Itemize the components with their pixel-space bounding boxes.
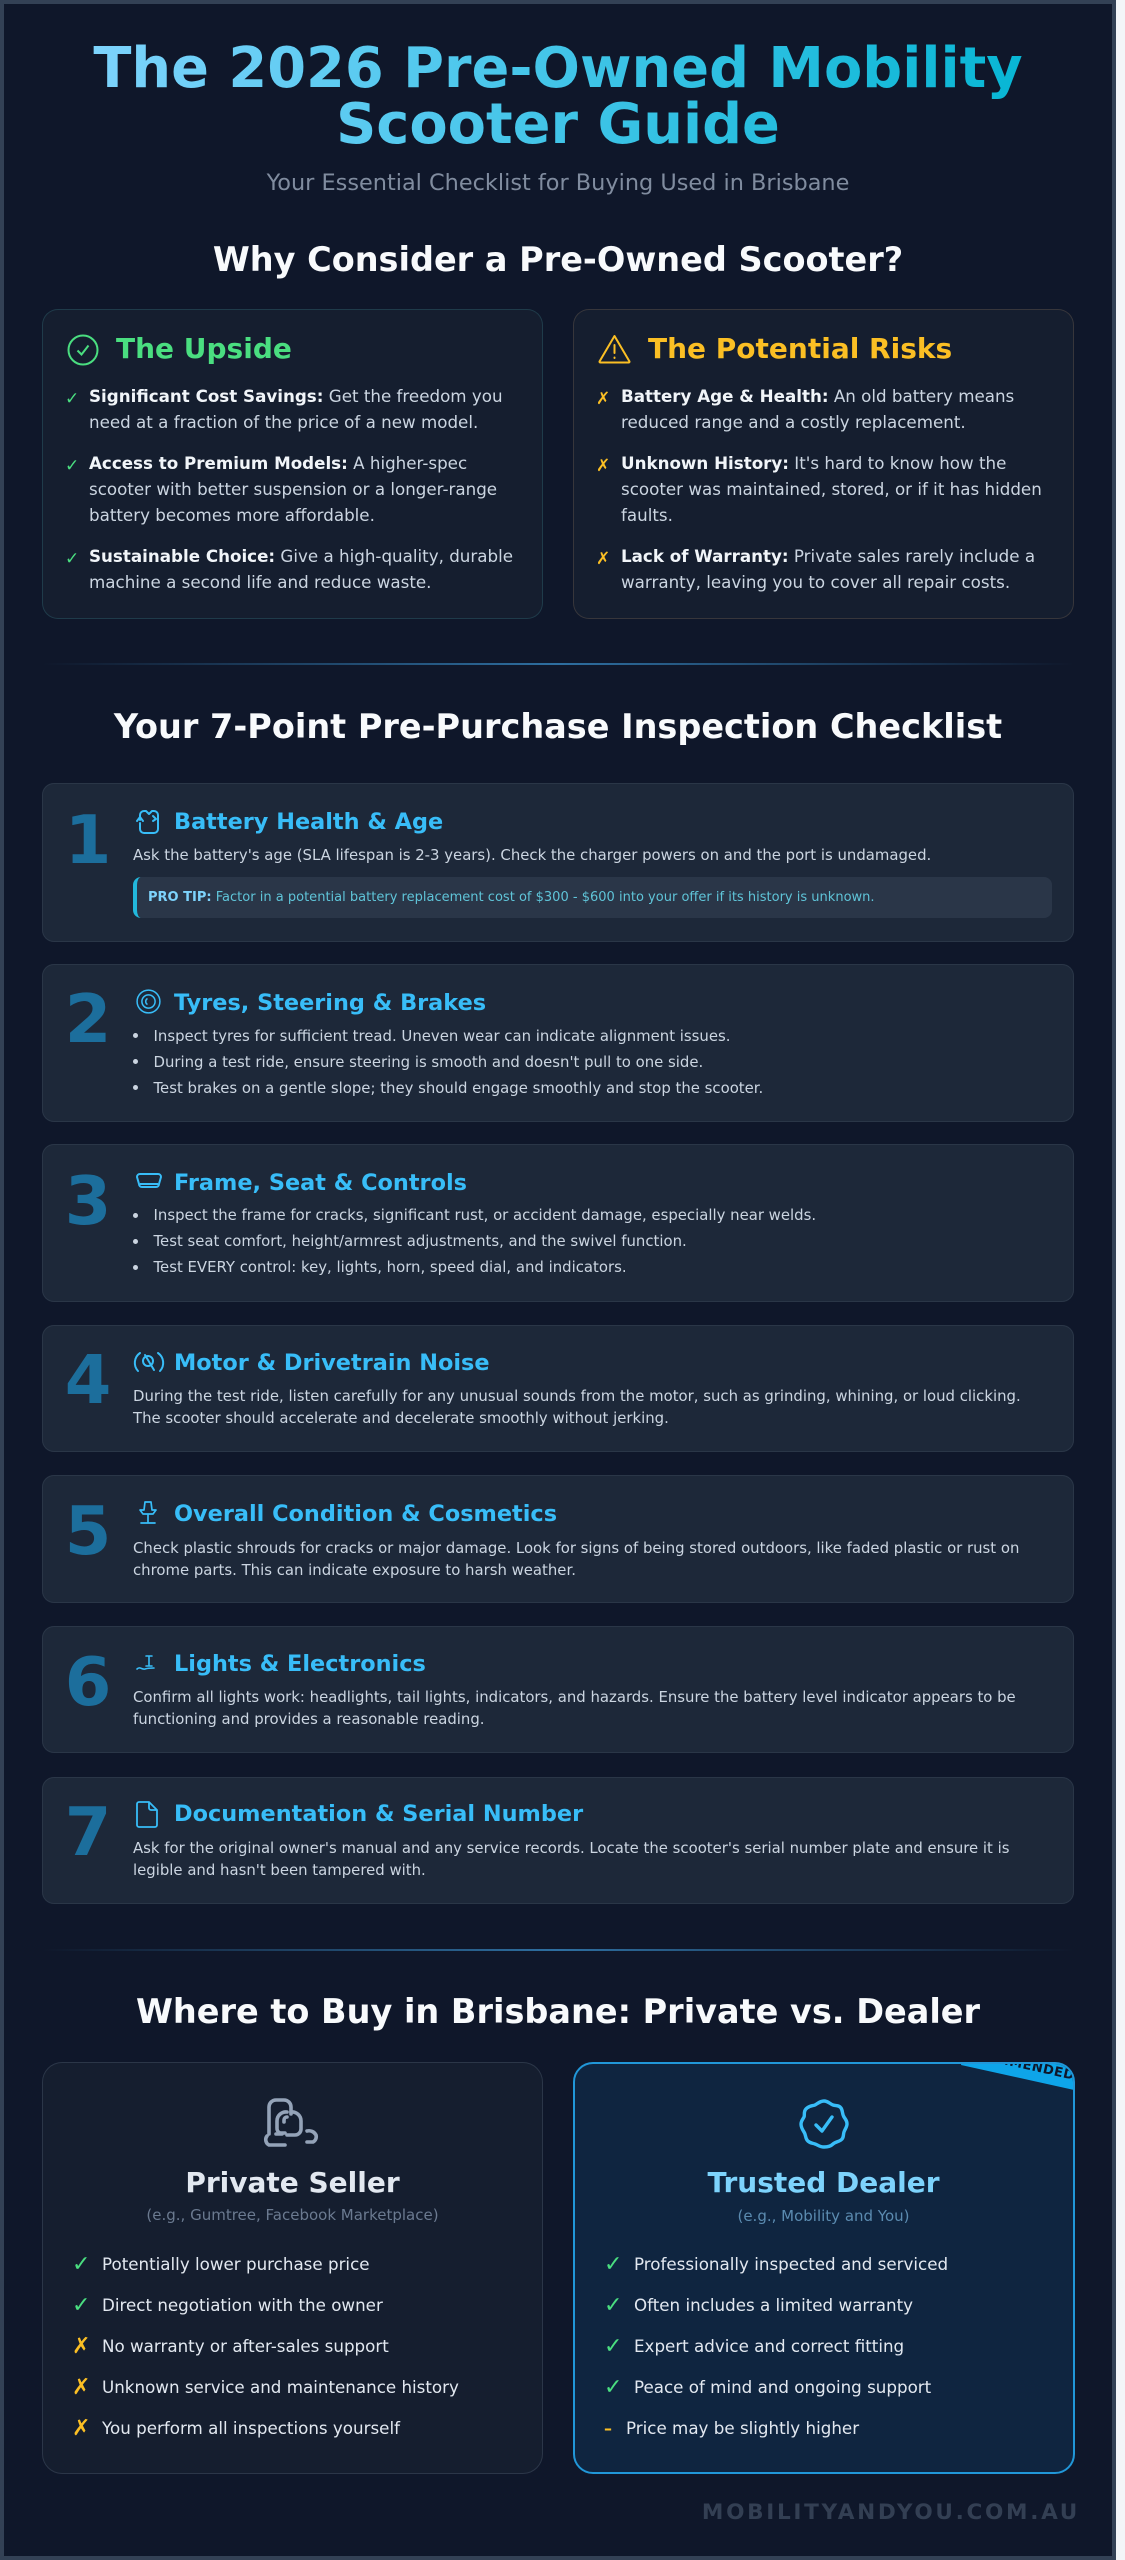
risk item 2: faults. — [621, 505, 673, 525]
icon: check circle — [68, 334, 98, 366]
step text: Ask for the original owner's manual and any service records. Locate the scooter's serial number plate and ensure it is — [133, 1839, 1010, 1857]
risk item 2: scooter was maintained, stored, or if it has hidden — [621, 479, 1042, 499]
step bullets — [133, 1026, 763, 1096]
panel: the upside: ✓ — [65, 389, 79, 409]
panel: trusted dealer: ✓ — [604, 2334, 622, 2359]
step text: During the test ride, listen carefully for any unusual sounds from the motor, such as grinding, whining, or loud clicking. — [133, 1387, 1021, 1405]
step 3: frame: Inspect the frame for cracks, significant rust, or accident damage, especially near welds. — [154, 1206, 816, 1224]
upside item 2 — [65, 453, 497, 525]
panel: trusted dealer: Peace of mind and ongoing support — [634, 2376, 931, 2396]
panel: private seller: ✓ — [72, 2252, 90, 2277]
heading: the upside: The Upside — [116, 332, 292, 365]
panel: the upside: ✓ — [65, 549, 79, 569]
callout: pro tip — [133, 877, 1052, 918]
step text: Ask the battery's age (SLA lifespan is 2-3 years). Check the charger powers on and the port is undamaged. — [133, 846, 931, 864]
heading: the potential risks: The Potential Risks — [648, 332, 952, 365]
step 3: frame: Test EVERY control: key, lights, horn, speed dial, and indicators. — [154, 1258, 627, 1276]
step 6: lights — [42, 1626, 1074, 1753]
panel: the potential risks — [573, 309, 1074, 619]
title — [93, 36, 1023, 156]
step 2: tyres: Test brakes on a gentle slope; they should engage smoothly and stop the scooter. — [154, 1078, 763, 1096]
upside item 2: scooter with better suspension or a longer-range — [89, 479, 497, 499]
step 3: frame — [42, 1144, 1074, 1302]
step text — [133, 1539, 1019, 1579]
ribbon: recommended — [960, 2006, 1125, 2108]
panel: the upside — [42, 309, 543, 619]
upside item 2: Access to Premium Models: A higher-spec — [89, 453, 467, 473]
step 1: battery — [42, 783, 1074, 942]
panel: trusted dealer: Expert advice and correct fitting — [634, 2336, 904, 2356]
pros and cons list — [72, 2252, 459, 2441]
upside item 3 — [65, 546, 513, 592]
icon: document — [136, 1801, 158, 1828]
step title: Battery Health & Age — [174, 809, 443, 835]
step 3: frame: Test seat comfort, height/armrest adjustments, and the swivel function. — [154, 1232, 687, 1250]
panel: private seller: Unknown service and maintenance history — [102, 2376, 459, 2396]
icon: motor noise — [134, 1352, 164, 1372]
pros and cons list — [604, 2252, 948, 2438]
panel: the potential risks: ✗ — [596, 456, 610, 476]
risk item 1: reduced range and a costly replacement. — [621, 412, 966, 432]
step text — [133, 1839, 1010, 1879]
number 3: 3 — [65, 1162, 111, 1240]
panel: trusted dealer: ✓ — [604, 2293, 622, 2318]
step text: Check plastic shrouds for cracks or major damage. Look for signs of being stored outdoors, like faded plastic or rust on — [133, 1539, 1019, 1557]
panel: trusted dealer: ✓ — [604, 2375, 622, 2400]
upside item 3: Sustainable Choice: Give a high-quality, durable — [89, 546, 513, 566]
icon: seat — [136, 1173, 162, 1188]
step text: functioning and provides a reasonable reading. — [133, 1710, 485, 1728]
risk item 3 — [596, 546, 1035, 592]
step text — [132, 1387, 1021, 1427]
risk item 3: Lack of Warranty: Private sales rarely include a — [621, 546, 1035, 566]
panel: private seller: Potentially lower purchase price — [102, 2254, 370, 2274]
step 2: tyres — [42, 964, 1074, 1122]
step title: Frame, Seat & Controls — [174, 1170, 467, 1196]
number 6: 6 — [65, 1643, 111, 1721]
upside item 1: Significant Cost Savings: Get the freedom you — [89, 386, 503, 406]
icon: battery — [136, 810, 159, 834]
icon: private seller — [264, 2098, 318, 2147]
number 7: 7 — [65, 1793, 111, 1871]
risk item 1: Battery Age & Health: An old battery means — [621, 386, 1014, 406]
panel: private seller: Direct negotiation with the owner — [102, 2294, 383, 2314]
panel: trusted dealer: Often includes a limited warranty — [634, 2294, 913, 2314]
number 5: 5 — [65, 1492, 111, 1570]
panel: private seller: ✓ — [72, 2293, 90, 2318]
step text: Confirm all lights work: headlights, tail lights, indicators, and hazards. Ensure the battery level indicator appears to be — [133, 1688, 1016, 1706]
icon: stand — [139, 1501, 157, 1524]
risk item 2 — [596, 453, 1042, 525]
step title: Tyres, Steering & Brakes — [174, 990, 486, 1016]
heading: checklist: Your 7-Point Pre-Purchase Inspection Checklist — [114, 706, 1002, 746]
number 2: 2 — [65, 980, 111, 1058]
number 1: 1 — [65, 801, 111, 879]
step text: chrome parts. This can indicate exposure to harsh weather. — [133, 1561, 576, 1579]
step 2: tyres: Inspect tyres for sufficient tread. Uneven wear can indicate alignment issues. — [154, 1026, 730, 1044]
panel: private seller: You perform all inspections yourself — [102, 2418, 400, 2438]
step text: The scooter should accelerate and decelerate smoothly without jerking. — [133, 1409, 669, 1427]
title: Scooter Guide — [336, 92, 780, 156]
step 7: documents — [42, 1777, 1074, 1904]
upside item 2: battery becomes more affordable. — [89, 505, 375, 525]
panel: private seller: ✗ — [72, 2334, 90, 2359]
icon: lights — [136, 1655, 155, 1670]
upside item 1: need at a fraction of the price of a new model. — [89, 412, 478, 432]
heading: where to buy: Where to Buy in Brisbane: Private vs. Dealer — [136, 1992, 980, 2031]
panel: trusted dealer: Professionally inspected and serviced — [634, 2254, 948, 2274]
upside item 3: machine a second life and reduce waste. — [89, 572, 431, 592]
panel: private seller: ✗ — [72, 2416, 90, 2441]
step bullets — [133, 1206, 816, 1276]
number 4: 4 — [65, 1341, 111, 1419]
step text — [133, 1688, 1016, 1728]
card subtitle: (e.g., Mobility and You) — [737, 2207, 910, 2225]
card title: Private Seller — [185, 2166, 400, 2199]
panel: the potential risks: ✗ — [596, 549, 610, 569]
panel: trusted dealer: ✓ — [604, 2252, 622, 2277]
step 5: overall condition — [42, 1475, 1074, 1603]
heading: why consider: Why Consider a Pre-Owned Scooter? — [213, 240, 903, 279]
panel: private seller: No warranty or after-sales support — [102, 2336, 389, 2356]
pro tip text: PRO TIP: Factor in a potential battery replacement cost of $300 - $600 into your offer if its history is unknown. — [148, 890, 875, 904]
step title: Lights & Electronics — [174, 1651, 426, 1677]
panel: trusted dealer — [573, 2062, 1075, 2474]
panel: trusted dealer: – — [604, 2419, 612, 2438]
subtitle: Your Essential Checklist for Buying Used in Brisbane — [267, 170, 849, 196]
upside item 1 — [65, 386, 503, 432]
icon: tyre — [136, 989, 161, 1014]
panel: private seller — [42, 2062, 543, 2474]
icon: warning triangle — [598, 335, 630, 364]
footer brand: MOBILITYANDYOU.COM.AU — [702, 2500, 1080, 2525]
panel: the potential risks: ✗ — [596, 389, 610, 409]
panel: the upside: ✓ — [65, 456, 79, 476]
step text: legible and hasn't been tampered with. — [133, 1861, 426, 1879]
risk item 1 — [596, 386, 1014, 432]
icon: verified badge — [799, 2099, 849, 2149]
step 2: tyres: During a test ride, ensure steering is smooth and doesn't pull to one side. — [154, 1052, 703, 1070]
panel: private seller: ✗ — [72, 2375, 90, 2400]
step title: Overall Condition & Cosmetics — [174, 1501, 557, 1527]
title: The 2026 Pre-Owned Mobility — [93, 36, 1023, 101]
card title: Trusted Dealer — [707, 2166, 940, 2199]
risk item 2: Unknown History: It's hard to know how the — [621, 453, 1006, 473]
risk item 3: warranty, leaving you to cover all repair costs. — [621, 572, 1010, 592]
step 4: motor — [42, 1325, 1074, 1452]
card subtitle: (e.g., Gumtree, Facebook Marketplace) — [146, 2206, 439, 2224]
step title: Motor & Drivetrain Noise — [174, 1350, 490, 1376]
step title: Documentation & Serial Number — [174, 1801, 583, 1827]
panel: trusted dealer: Price may be slightly higher — [626, 2418, 859, 2438]
